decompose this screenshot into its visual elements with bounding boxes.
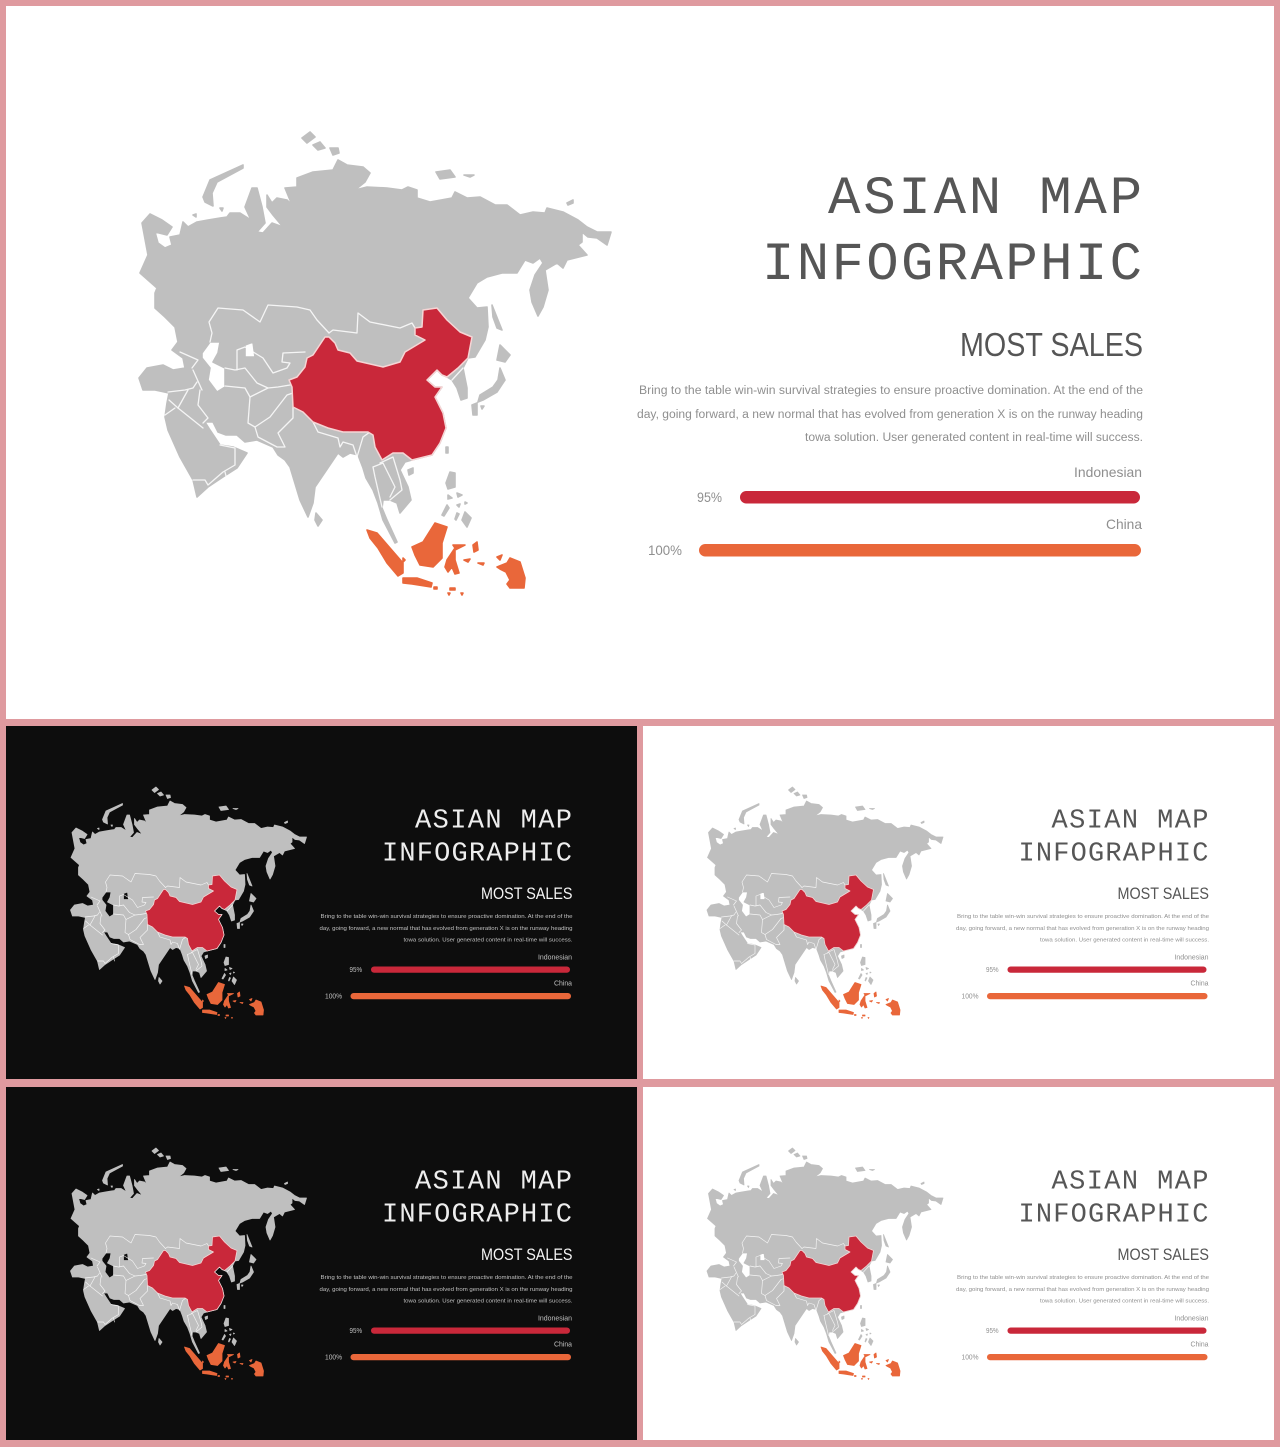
title: INFOGRAPHIC [1018, 840, 1208, 870]
body paragraph: Bring to the table win-win survival strategies to ensure proactive domination. At the end of the [639, 385, 1143, 397]
progress bar: Indonesian 95%: 95% [697, 489, 722, 505]
title [382, 806, 572, 870]
progress bar: Indonesian 95%: Indonesian [1174, 954, 1209, 962]
slide content [707, 1148, 1209, 1380]
country borders [165, 305, 463, 507]
progress bar: Indonesian 95%: Indonesian [538, 954, 572, 962]
progress bar: Indonesian 95%: 95% [350, 1328, 362, 1335]
heading: most sales: MOST SALES [1118, 1246, 1209, 1264]
title [1018, 806, 1208, 870]
progress bar: China 100%: 100% [648, 542, 682, 558]
body paragraph [956, 1275, 1209, 1304]
heading: most sales: MOST SALES [481, 1246, 572, 1264]
body paragraph: towa solution. User generated content in real-time will success. [1040, 1298, 1209, 1304]
progress bar: China 100%: China [554, 1342, 572, 1348]
progress bar: Indonesian 95% [986, 1316, 1209, 1335]
body paragraph: towa solution. User generated content in real-time will success. [1040, 938, 1209, 944]
title: INFOGRAPHIC [762, 235, 1142, 296]
slide content [70, 1148, 573, 1380]
progress bar: China 100%: China [1190, 1342, 1209, 1348]
title [382, 1168, 572, 1230]
title: INFOGRAPHIC [382, 840, 572, 870]
heading: most sales: MOST SALES [1118, 885, 1209, 903]
title: INFOGRAPHIC [1018, 1200, 1208, 1230]
progress bar: Indonesian 95%: 95% [350, 967, 362, 974]
progress bar: Indonesian 95%: Indonesian [1174, 1316, 1209, 1322]
progress bar: China 100% [962, 1342, 1209, 1362]
map of Asia [707, 787, 943, 1018]
body paragraph: towa solution. User generated content in real-time will success. [404, 1298, 573, 1304]
panel: white slide top right [643, 726, 1274, 1079]
body paragraph: day, going forward, a new normal that has evolved from generation X is on the runway heading [956, 926, 1209, 932]
progress bar: Indonesian 95%: Indonesian [1074, 464, 1142, 480]
body paragraph: day, going forward, a new normal that has evolved from generation X is on the runway heading [320, 1287, 572, 1293]
progress bar: Indonesian 95%: 95% [986, 1328, 998, 1335]
body paragraph: day, going forward, a new normal that has evolved from generation X is on the runway heading [956, 1287, 1209, 1293]
progress bar: China 100%: 100% [325, 994, 342, 1000]
progress bar: China 100% [962, 980, 1209, 1000]
body paragraph [320, 1275, 573, 1304]
body paragraph: Bring to the table win-win survival strategies to ensure proactive domination. At the end of the [957, 1275, 1209, 1281]
title: ASIAN MAP [415, 1168, 572, 1198]
body paragraph [637, 385, 1143, 444]
title: ASIAN MAP [415, 806, 572, 836]
body paragraph [320, 914, 573, 944]
panel: dark slide top left [6, 726, 637, 1079]
progress bar: China 100% [325, 980, 572, 1000]
body paragraph: towa solution. User generated content in real-time will success. [404, 938, 573, 944]
map of Asia [139, 132, 611, 595]
progress bar: China 100%: China [1106, 516, 1142, 532]
China highlighted in red [289, 308, 472, 460]
progress bar: Indonesian 95%: Indonesian [538, 1316, 572, 1322]
slide content [70, 787, 573, 1018]
title [1018, 1168, 1208, 1230]
body paragraph [956, 914, 1209, 944]
title: ASIAN MAP [828, 169, 1142, 230]
progress bar: China 100% [648, 516, 1142, 558]
panel: large white slide [6, 6, 1274, 719]
slide content [707, 787, 1209, 1018]
arctic and pacific islands [193, 132, 573, 527]
progress bar: China 100%: China [1190, 980, 1209, 988]
progress bar: China 100%: China [554, 980, 572, 988]
progress bar: China 100% [325, 1342, 572, 1362]
body paragraph: Bring to the table win-win survival strategies to ensure proactive domination. At the end of the [320, 914, 572, 920]
heading: most sales: MOST SALES [481, 885, 572, 903]
title: ASIAN MAP [1052, 1168, 1208, 1198]
title [762, 169, 1142, 296]
progress bar: China 100%: 100% [962, 1354, 978, 1362]
heading: most sales: MOST SALES [960, 326, 1143, 363]
body paragraph: day, going forward, a new normal that has evolved from generation X is on the runway heading [320, 926, 572, 932]
progress bar: China 100%: 100% [962, 994, 978, 1000]
body paragraph: day, going forward, a new normal that has evolved from generation X is on the runway heading [637, 409, 1143, 421]
land mass in grey [139, 160, 611, 543]
map of Asia [707, 1148, 943, 1380]
progress bar: China 100%: 100% [325, 1354, 342, 1362]
progress bar: Indonesian 95% [350, 954, 572, 974]
map of Asia [70, 1148, 306, 1380]
progress bar: Indonesian 95% [986, 954, 1209, 974]
map of Asia [70, 787, 306, 1018]
progress bar: Indonesian 95%: 95% [986, 967, 998, 974]
body paragraph: Bring to the table win-win survival strategies to ensure proactive domination. At the end of the [957, 914, 1209, 920]
body paragraph: towa solution. User generated content in real-time will success. [805, 432, 1143, 444]
progress bar: Indonesian 95% [350, 1316, 572, 1335]
title: ASIAN MAP [1052, 806, 1208, 836]
Indonesia highlighted in orange [367, 523, 525, 595]
panel: white slide bottom right [643, 1087, 1274, 1440]
panel: dark slide bottom left [6, 1087, 637, 1440]
progress bar: Indonesian 95% [697, 464, 1142, 505]
body paragraph: Bring to the table win-win survival strategies to ensure proactive domination. At the end of the [320, 1275, 572, 1281]
title: INFOGRAPHIC [382, 1200, 572, 1230]
